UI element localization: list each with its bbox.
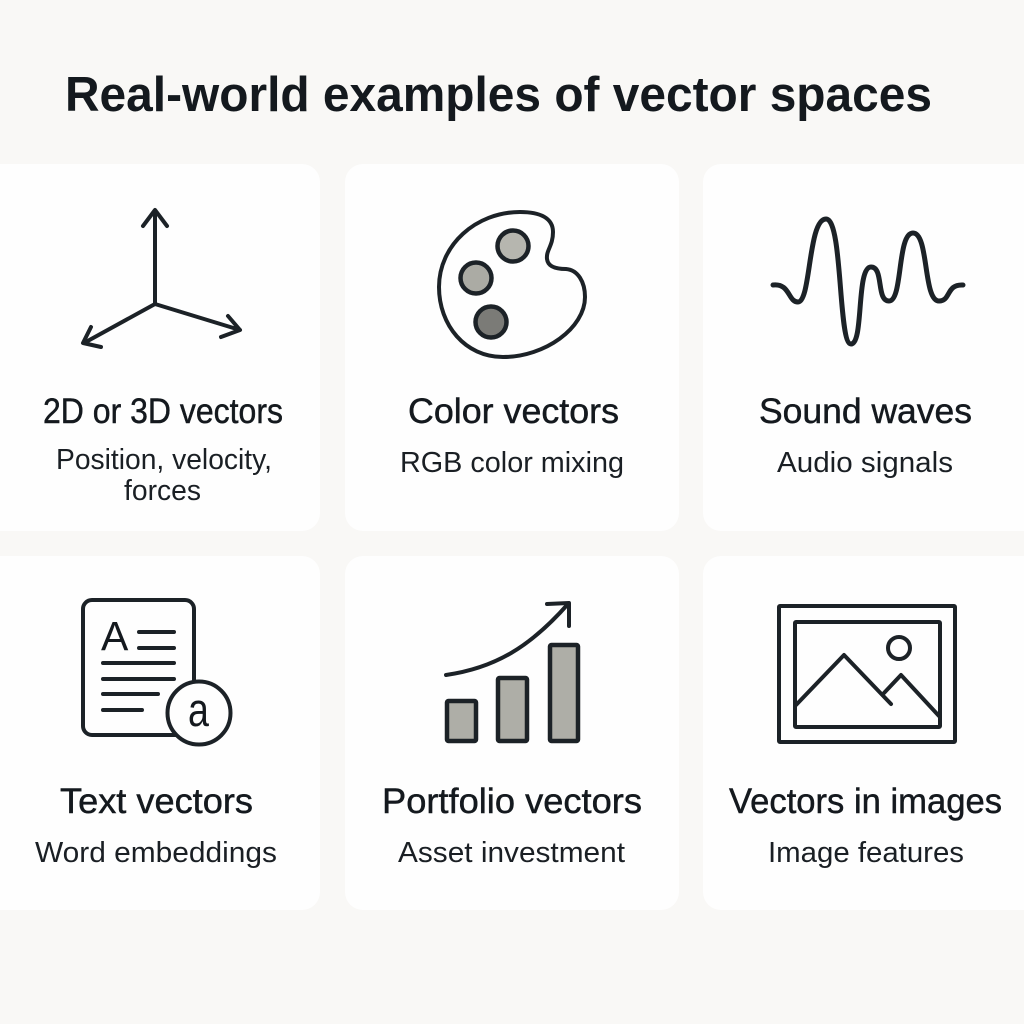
icon: framed landscape picture	[779, 606, 955, 742]
icon: rising bar chart with arrow	[446, 603, 578, 741]
panel: Text vectors	[0, 556, 320, 910]
heading: 2D or 3D vectors: 2D or 3D vectors	[43, 392, 283, 431]
heading: Portfolio vectors: Portfolio vectors	[382, 782, 642, 821]
icon: document with letter badge: a	[188, 684, 209, 737]
heading: Vectors in images: Vectors in images	[729, 782, 1002, 821]
description: position, velocity, forces: Position, velocity,	[56, 444, 272, 476]
description: Asset investment: Asset investment	[398, 837, 625, 869]
panel: Portfolio vectors	[345, 556, 679, 910]
heading: Color vectors: Color vectors	[408, 392, 619, 431]
icon: sound wave	[773, 219, 963, 344]
panel: Vectors in images	[703, 556, 1024, 910]
icon: paint palette	[439, 212, 585, 357]
description: Word embeddings: Word embeddings	[35, 837, 277, 869]
description: position, velocity, forces	[56, 444, 272, 507]
icon: document with letter badge: A	[101, 613, 129, 659]
panel: 2D or 3D vectors	[0, 164, 320, 531]
description: position, velocity, forces: forces	[124, 475, 201, 507]
title: Real-world examples of vector spaces	[65, 68, 932, 122]
icon: three axes arrows	[83, 210, 240, 347]
description: RGB color mixing: RGB color mixing	[400, 447, 624, 479]
icon: document with letter badge	[83, 600, 230, 744]
description: Image features: Image features	[768, 837, 964, 869]
description: Audio signals: Audio signals	[777, 447, 953, 479]
heading: Text vectors: Text vectors	[60, 782, 253, 821]
panel: Color vectors	[345, 164, 679, 531]
panel: Sound waves	[703, 164, 1024, 531]
heading: Sound waves: Sound waves	[759, 392, 972, 431]
